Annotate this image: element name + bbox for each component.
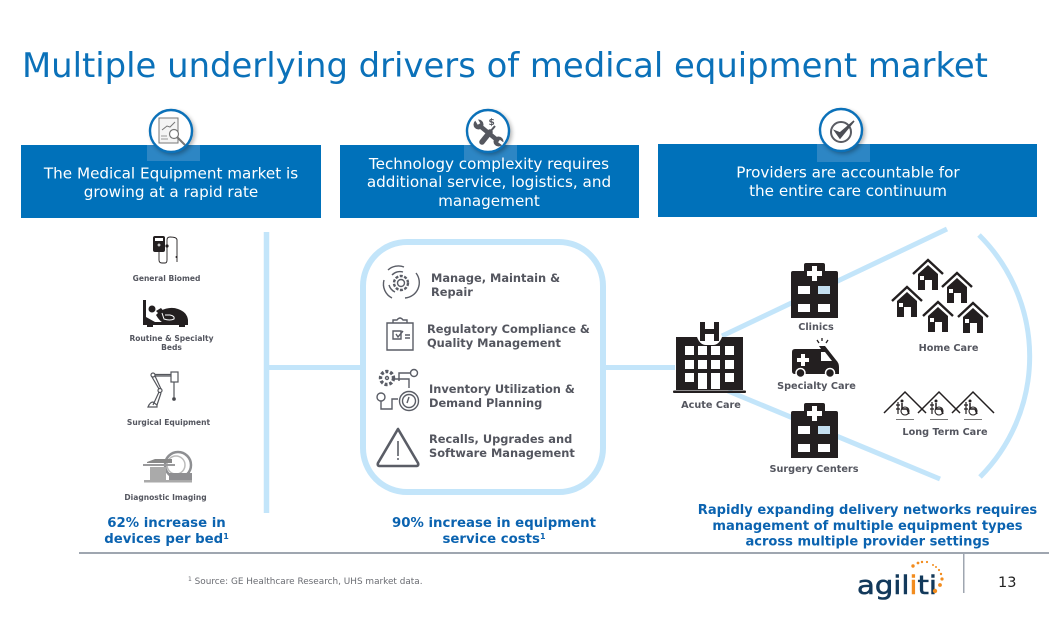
panel: technology complexity header [340,145,639,218]
icon: ambulance [792,338,839,378]
label: acute care: Acute Care [681,400,741,411]
label: surgery centers: Surgery Centers [770,464,859,475]
text: recalls upgrades: Software Management [429,446,575,460]
label: home care: Home Care [919,343,979,354]
stat: devices per bed: devices per bed [104,532,223,547]
label: diagnostic imaging: Diagnostic Imaging [124,493,207,502]
icon: routine and specialty bed [143,300,188,327]
panel: technology complexity header: management [438,192,540,210]
footnote: Source: GE Healthcare Research, UHS market data. [192,577,423,587]
label: routine and specialty beds [129,334,214,352]
logo: agiliti [857,561,944,601]
icon: chart report badge [150,110,195,155]
icon: long term care [884,392,994,420]
stat: service costs: service costs [442,532,540,547]
title: Multiple underlying drivers of medical equipment market [22,46,988,85]
stat: devices per bed: 62% increase in [107,516,226,531]
icon: manage gear [383,266,419,298]
text: inventory utilization [429,382,575,410]
footer rule [79,552,1049,554]
logo: agiliti: agiliti [857,571,937,601]
icon: warning triangle [378,429,418,466]
label: routine and specialty beds: Beds [161,343,182,352]
icon: tools badge: $ [488,118,495,128]
icon: home care houses [892,260,988,333]
panel: providers accountable header [658,144,1037,217]
label: specialty care: Specialty Care [777,381,856,392]
icon: inventory process [377,370,418,410]
panel: market growth header [21,145,321,218]
icon: surgery center building [791,403,838,458]
icon: general biomed [153,236,178,263]
label: long term care: Long Term Care [902,427,988,438]
column: equipment types [124,236,214,502]
text: inventory utilization: Demand Planning [429,396,542,410]
text: manage maintain repair: Manage, Maintain & [431,271,560,285]
icon: surgical equipment [148,372,178,407]
stat: service costs: 90% increase in equipment [392,516,597,531]
icon: clinic building [791,263,838,318]
text: recalls upgrades [429,432,575,460]
text: inventory utilization: Inventory Utilization & [429,382,575,396]
stat: delivery networks: Rapidly expanding delivery networks requires [698,503,1037,518]
stat: devices per bed [104,516,229,547]
panel: service requirements [363,242,603,492]
icon: acute care hospital [673,322,746,393]
label: surgical equipment: Surgical Equipment [127,418,210,427]
connector lines [266,229,1030,513]
text: regulatory compliance: Regulatory Compliance & [427,322,590,336]
stat: devices per bed: 1 [223,532,229,541]
footnote: 1 [188,576,192,583]
text: manage maintain repair [431,271,560,299]
icon: clipboard [387,318,413,350]
panel: providers accountable header: Providers are accountable for [736,164,960,182]
stat: delivery networks [698,503,1037,550]
footer divider [963,553,964,593]
stat: delivery networks: across multiple provider settings [745,534,990,550]
panel: technology complexity header: Technology complexity requires [368,155,609,173]
label: clinics: Clinics [798,322,834,333]
text: regulatory compliance: Quality Management [427,336,562,350]
label: routine and specialty beds: Routine & Specialty [129,334,214,343]
panel: technology complexity header: additional service, logistics, and [367,173,611,191]
panel: market growth header: The Medical Equipment market is [43,164,298,182]
label: general biomed: General Biomed [133,274,200,283]
page number: 13 [998,575,1016,591]
icon: tools badge [467,110,512,155]
icon: diagnostic imaging [143,452,192,482]
stat: service costs [392,516,597,547]
icon: checkmark badge [820,109,865,154]
text: regulatory compliance [427,322,590,350]
panel: market growth header: growing at a rapid rate [84,183,258,201]
text: recalls upgrades: Recalls, Upgrades and [429,432,572,446]
stat: service costs: 1 [540,532,546,541]
text: manage maintain repair: Repair [431,285,473,299]
panel: providers accountable header: the entire care continuum [749,182,947,200]
stat: delivery networks: management of multiple equipment types [712,519,1023,534]
